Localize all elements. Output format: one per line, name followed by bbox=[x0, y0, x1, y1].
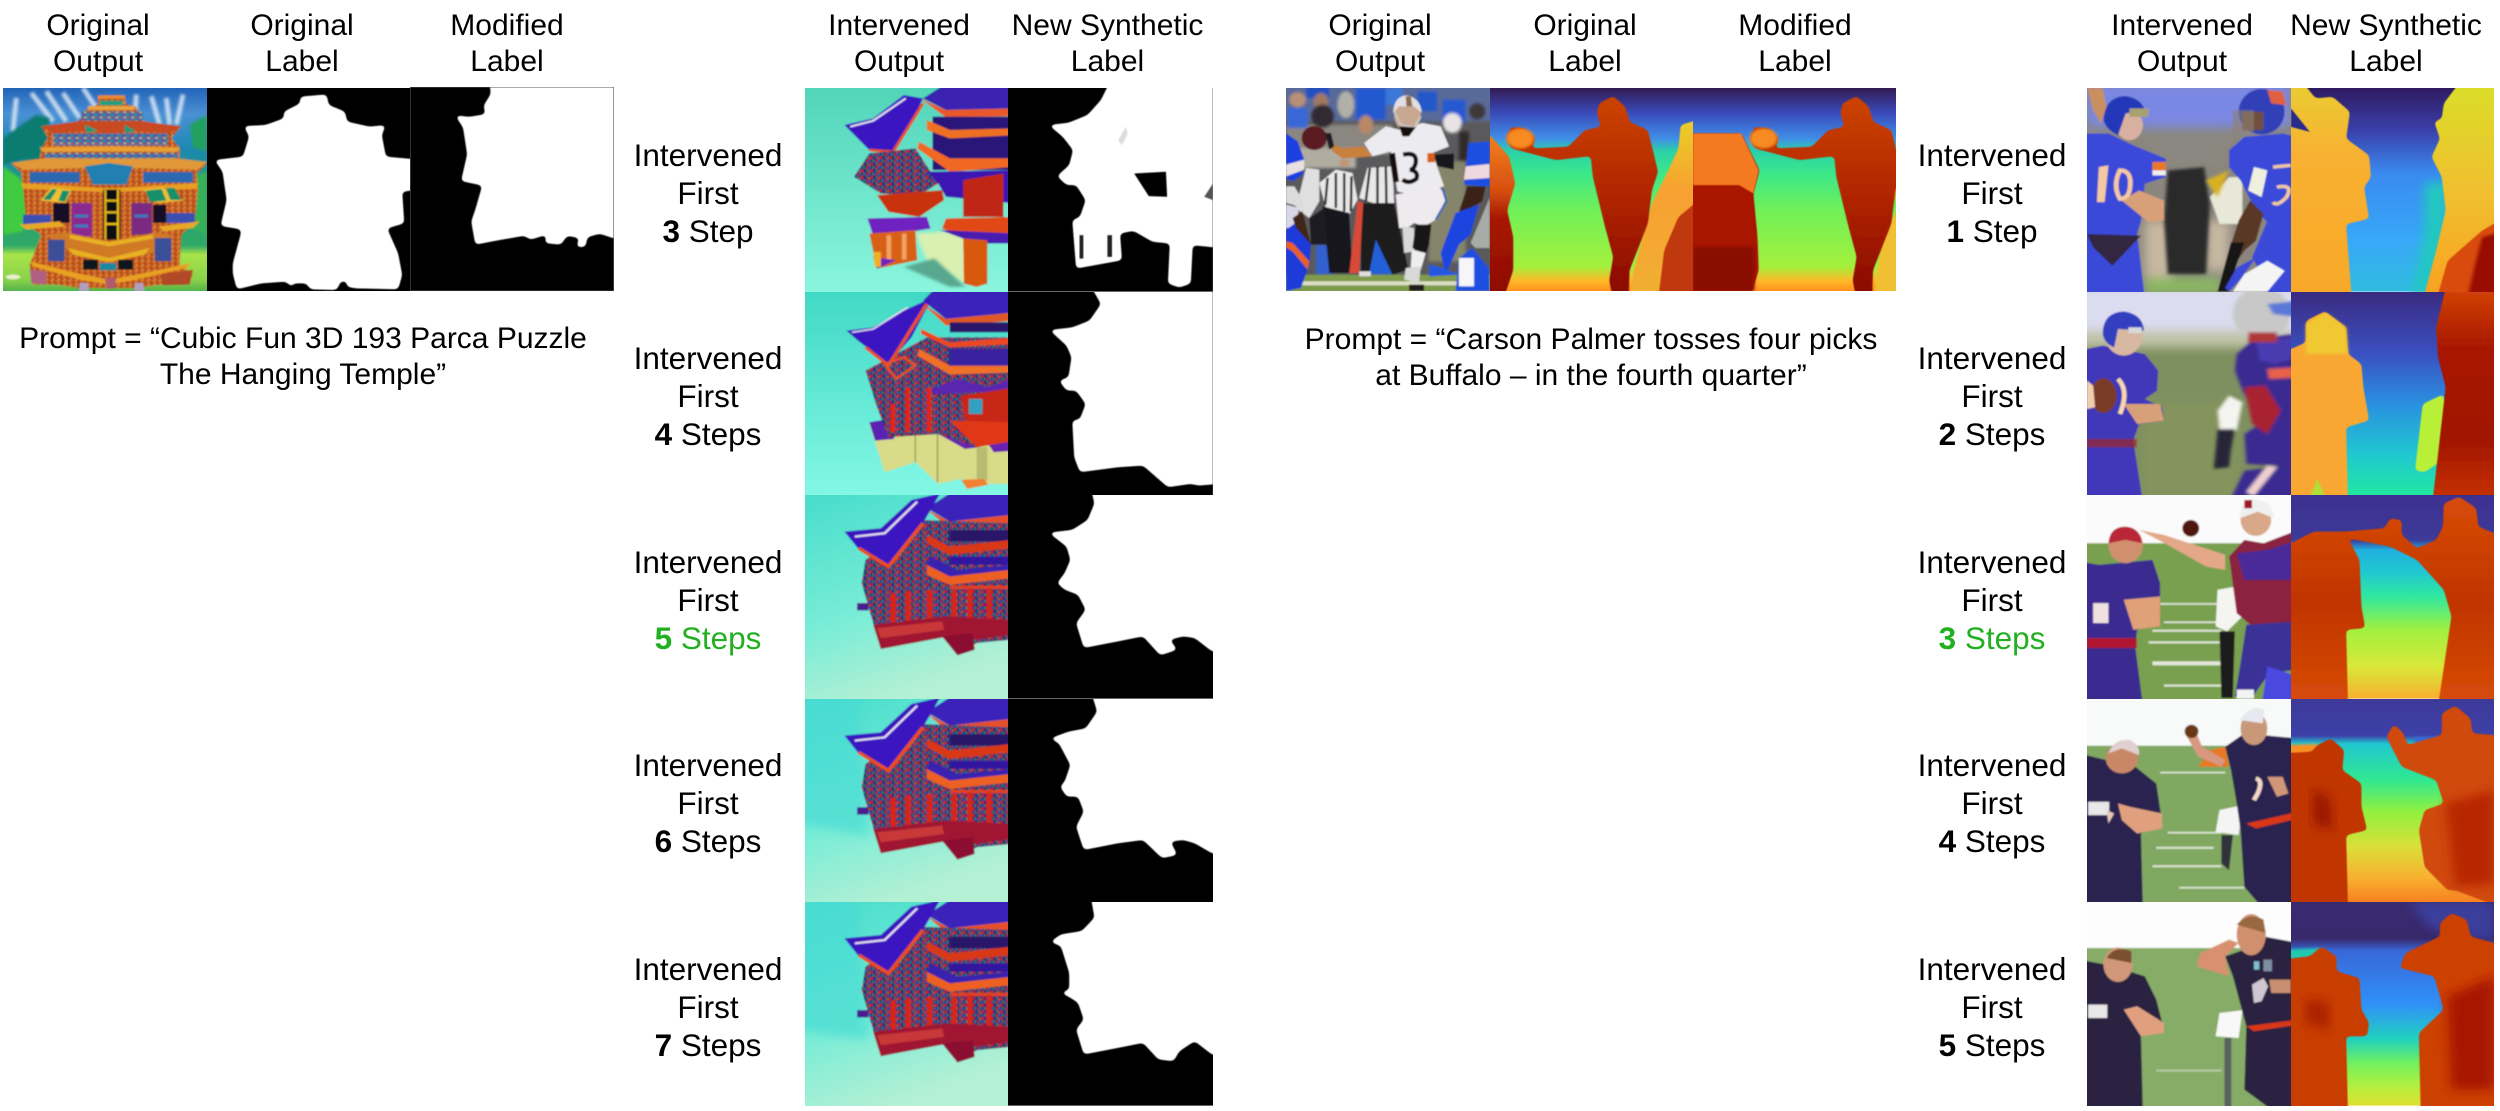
row label: first 7 steps: First bbox=[677, 988, 739, 1024]
row label: first 3 step bbox=[634, 136, 782, 248]
row label: first 6 steps: First bbox=[677, 784, 739, 820]
row label: first 2 steps: First bbox=[1961, 378, 2023, 414]
heading: Original Label bbox=[1533, 9, 1637, 78]
image: temple intervened 6 output bbox=[805, 699, 1008, 902]
image: football intervened 2 depth label bbox=[2291, 292, 2494, 495]
heading: Modified Label bbox=[1738, 9, 1852, 78]
heading: New Synthetic Label: New Synthetic bbox=[2290, 9, 2482, 42]
image: temple modified label mask bbox=[410, 87, 614, 291]
heading: Original Label: Original bbox=[1533, 9, 1637, 42]
panel: football intervened rows bbox=[1918, 9, 2482, 1062]
row label: first 4 steps bbox=[1892, 746, 2092, 860]
image: temple intervened 7 label bbox=[1008, 902, 1213, 1106]
heading: Intervened Output bbox=[828, 9, 970, 78]
row label: first 2 steps: 2 Steps bbox=[1939, 416, 2045, 452]
row label: first 1 step: 1 Step bbox=[1946, 212, 2038, 248]
row label: first 4 steps: 4 Steps bbox=[1939, 822, 2045, 858]
image: football intervened 5 output bbox=[2087, 902, 2291, 1106]
row label: first 7 steps bbox=[634, 950, 782, 1062]
row label: first 4 steps: Intervened bbox=[634, 340, 782, 376]
image: football intervened 5 depth label bbox=[2291, 902, 2494, 1106]
prompt text: at Buffalo – in the fourth quarter” bbox=[1375, 359, 1807, 392]
image: football modified depth label bbox=[1693, 88, 1896, 291]
prompt text bbox=[19, 322, 587, 391]
row label: first 3 steps, highlighted: First bbox=[1961, 582, 2023, 618]
row label: first 5 steps, highlighted: First bbox=[677, 582, 739, 618]
heading: New Synthetic Label bbox=[1012, 9, 1203, 78]
row label: first 6 steps: 6 Steps bbox=[655, 822, 761, 858]
row label: first 2 steps: Intervened bbox=[1918, 340, 2066, 376]
heading: Original Output: Output bbox=[1335, 45, 1425, 78]
heading: Intervened Output: Output bbox=[2137, 45, 2227, 78]
row label: first 4 steps: First bbox=[1961, 784, 2023, 820]
panel: temple intervened rows bbox=[634, 9, 1203, 1062]
heading: Original Output bbox=[46, 9, 150, 78]
image: football intervened 1 output bbox=[2087, 88, 2291, 292]
heading: Modified Label: Label bbox=[1758, 45, 1832, 78]
row label: first 4 steps: Intervened bbox=[1918, 746, 2066, 782]
heading: Original Output: Original bbox=[46, 9, 150, 42]
heading: Intervened Output bbox=[2111, 9, 2253, 78]
heading: New Synthetic Label bbox=[2290, 9, 2482, 78]
row label: first 3 step: Intervened bbox=[634, 136, 782, 172]
heading: Original Label: Original bbox=[250, 9, 354, 42]
heading: Original Output bbox=[1328, 9, 1432, 78]
row label: first 3 steps, highlighted: Intervened bbox=[1918, 544, 2066, 580]
image: football original depth label bbox=[1490, 88, 1693, 291]
heading: New Synthetic Label: Label bbox=[1071, 45, 1144, 78]
image: temple intervened 5 label bbox=[1008, 495, 1213, 699]
heading: Modified Label: Modified bbox=[1738, 9, 1852, 42]
heading: Intervened Output: Intervened bbox=[828, 9, 970, 42]
heading: New Synthetic Label: New Synthetic bbox=[1012, 9, 1203, 42]
image: temple intervened 4 output bbox=[805, 292, 1008, 495]
heading: Original Output: Output bbox=[53, 45, 143, 78]
row label: first 5 steps, highlighted: 5 Steps bbox=[655, 620, 761, 656]
heading: Modified Label: Label bbox=[470, 45, 544, 78]
image: football intervened 1 depth label bbox=[2291, 88, 2494, 292]
heading: Modified Label: Modified bbox=[450, 9, 564, 42]
prompt text bbox=[1305, 323, 1877, 392]
heading: Original Label: Label bbox=[1548, 45, 1622, 78]
row label: first 5 steps, highlighted: Intervened bbox=[634, 544, 782, 580]
image: football original output bbox=[1286, 88, 1490, 291]
row label: first 4 steps bbox=[634, 340, 782, 452]
row label: first 3 steps, highlighted: 3 Steps bbox=[1939, 620, 2045, 656]
prompt text: Prompt = “Carson Palmer tosses four picks bbox=[1305, 323, 1877, 356]
row label: first 7 steps: Intervened bbox=[634, 950, 782, 986]
image: temple intervened 5 output bbox=[805, 495, 1008, 699]
image: temple original output bbox=[3, 88, 207, 291]
row label: first 1 step bbox=[1918, 136, 2066, 248]
panel: temple original outputs and labels bbox=[3, 9, 614, 391]
row label: first 4 steps: First bbox=[677, 378, 739, 414]
heading: Modified Label bbox=[450, 9, 564, 78]
row label: first 5 steps bbox=[1892, 950, 2092, 1064]
image: temple intervened 4 label bbox=[1008, 292, 1213, 495]
image: temple intervened 6 label bbox=[1008, 699, 1213, 902]
row label: first 5 steps: 5 Steps bbox=[1939, 1026, 2045, 1062]
image: temple original label mask bbox=[207, 88, 410, 291]
heading: Intervened Output: Intervened bbox=[2111, 9, 2253, 42]
prompt text: The Hanging Temple” bbox=[160, 358, 446, 391]
row label: first 6 steps bbox=[634, 746, 782, 858]
image: football intervened 4 output bbox=[2087, 699, 2291, 902]
row label: first 3 steps, highlighted bbox=[1918, 544, 2066, 656]
image: temple intervened 7 output bbox=[805, 902, 1008, 1106]
row label: first 7 steps: 7 Steps bbox=[655, 1026, 761, 1062]
image: football intervened 2 output bbox=[2087, 292, 2291, 495]
prompt text: Prompt = “Cubic Fun 3D 193 Parca Puzzle bbox=[19, 322, 587, 355]
image: football intervened 4 depth label bbox=[2291, 699, 2494, 902]
row label: first 1 step: First bbox=[1961, 174, 2023, 210]
panel: football original output and labels bbox=[1305, 9, 1877, 392]
image: temple intervened 3 output bbox=[805, 88, 1008, 292]
image: temple intervened 3 label bbox=[1008, 88, 1213, 292]
row label: first 6 steps: Intervened bbox=[634, 746, 782, 782]
heading: Original Output: Original bbox=[1328, 9, 1432, 42]
heading: Original Label: Label bbox=[265, 45, 339, 78]
row label: first 5 steps, highlighted bbox=[634, 544, 782, 656]
row label: first 2 steps bbox=[1918, 340, 2066, 452]
row label: first 3 step: 3 Step bbox=[662, 212, 754, 248]
image: football intervened 3 output bbox=[2087, 495, 2291, 699]
heading: Intervened Output: Output bbox=[854, 45, 944, 78]
heading: Original Label bbox=[250, 9, 354, 78]
image: football intervened 3 depth label bbox=[2291, 495, 2494, 699]
row label: first 1 step: Intervened bbox=[1918, 136, 2066, 172]
row label: first 4 steps: 4 Steps bbox=[655, 416, 761, 452]
row label: first 5 steps: First bbox=[1961, 988, 2023, 1024]
row label: first 3 step: First bbox=[677, 174, 739, 210]
row label: first 5 steps: Intervened bbox=[1918, 950, 2066, 986]
heading: New Synthetic Label: Label bbox=[2349, 45, 2423, 78]
